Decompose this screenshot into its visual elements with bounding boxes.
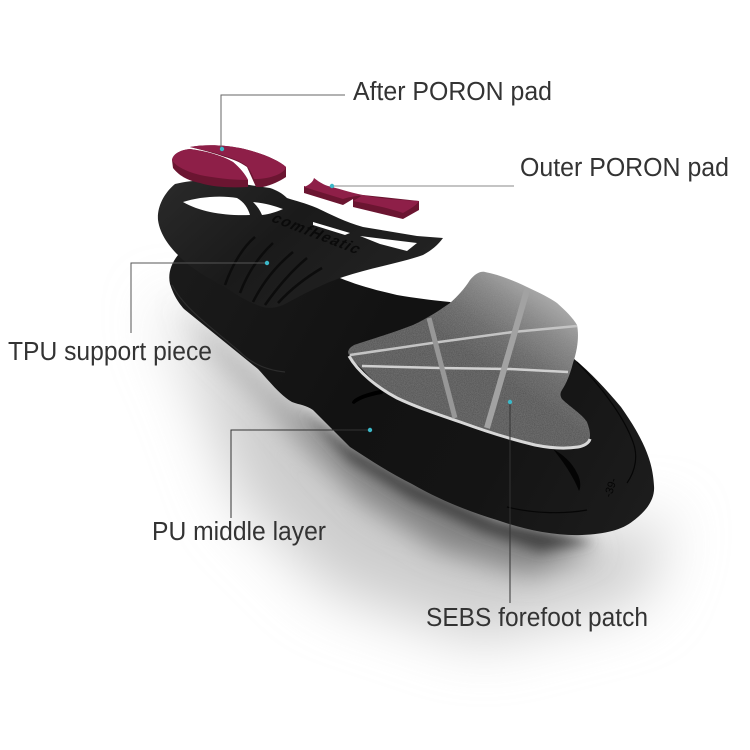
TPU support piece	[158, 181, 443, 308]
arch slot	[352, 389, 386, 404]
rim groove on heel	[172, 285, 285, 372]
label: TPU support piece: TPU support piece	[8, 338, 212, 366]
marker dots	[220, 147, 512, 432]
patch edge highlight	[349, 356, 590, 448]
support ribs	[225, 237, 322, 305]
Outer PORON pad	[304, 178, 419, 219]
label: Outer PORON pad: Outer PORON pad	[520, 154, 729, 182]
rear pad left	[172, 149, 248, 187]
toe rim groove	[507, 362, 636, 513]
leader: After PORON pad	[221, 95, 345, 149]
toe groove	[553, 449, 580, 491]
leader: TPU support piece	[131, 263, 267, 333]
leader: SEBS forefoot patch	[509, 402, 511, 603]
After PORON pad	[172, 145, 286, 187]
logo lettering: comfHeatic	[267, 211, 365, 257]
SEBS forefoot patch	[348, 272, 590, 448]
leader: PU middle layer	[231, 430, 370, 518]
drop shadow under insole	[160, 300, 670, 640]
size mark: -39-	[602, 476, 620, 499]
label: After PORON pad: After PORON pad	[353, 78, 552, 106]
label: SEBS forefoot patch: SEBS forefoot patch	[426, 604, 648, 632]
rear pad right	[190, 145, 286, 187]
leader: Outer PORON pad	[332, 185, 514, 187]
PU middle layer	[169, 255, 654, 535]
label: PU middle layer: PU middle layer	[152, 518, 326, 546]
patch ribs	[350, 290, 577, 428]
